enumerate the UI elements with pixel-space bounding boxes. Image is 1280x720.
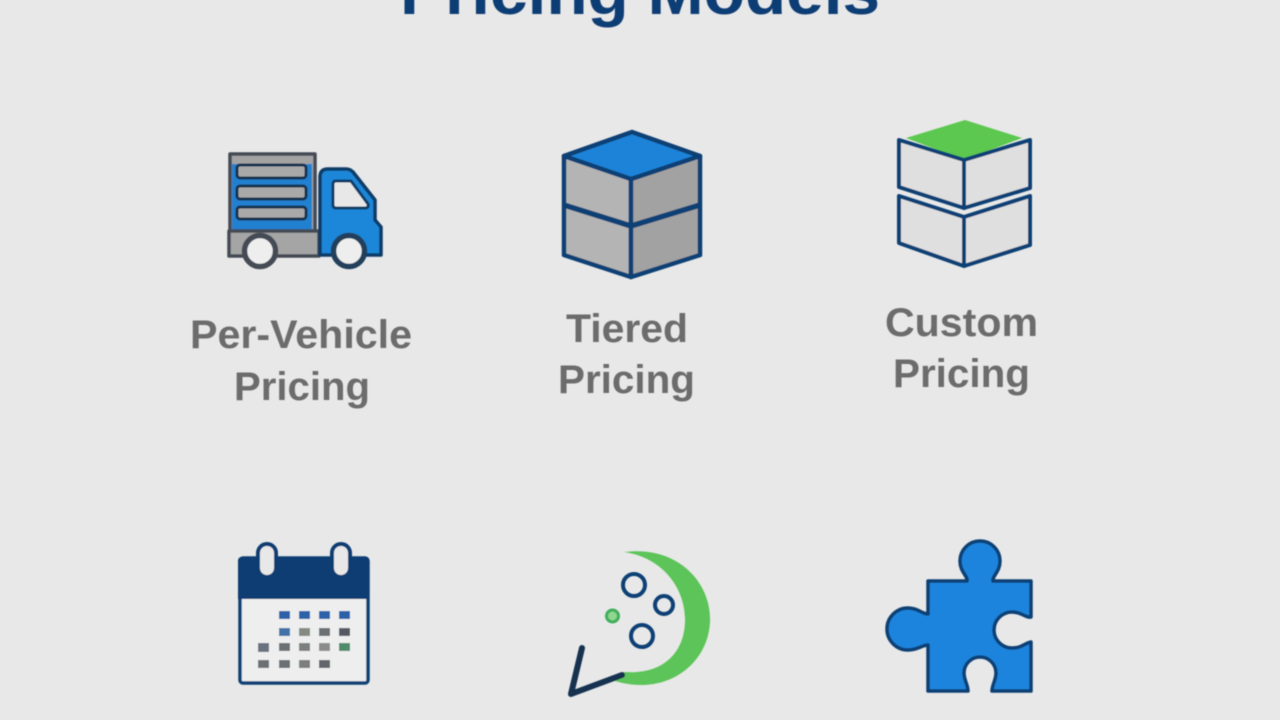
label: Per-Vehicle Pricing: Pricing [234,365,370,409]
label: Per-Vehicle Pricing [190,313,412,409]
label: Per-Vehicle Pricing: Per-Vehicle [190,313,412,357]
icon: custom stacked boxes [899,120,1030,266]
label: Tiered Pricing: Pricing [558,358,695,402]
icon: puzzle piece [887,541,1031,691]
label: Custom Pricing: Custom [885,301,1038,345]
label: Tiered Pricing: Tiered [566,307,688,351]
label: Custom Pricing [885,301,1038,396]
icon: calendar [238,544,369,683]
label: Custom Pricing: Pricing [893,352,1030,396]
label: Tiered Pricing [558,307,695,402]
icon: tiered cube [564,132,700,277]
icon: crescent with circles and check [571,551,710,694]
icon: delivery truck [229,154,381,266]
